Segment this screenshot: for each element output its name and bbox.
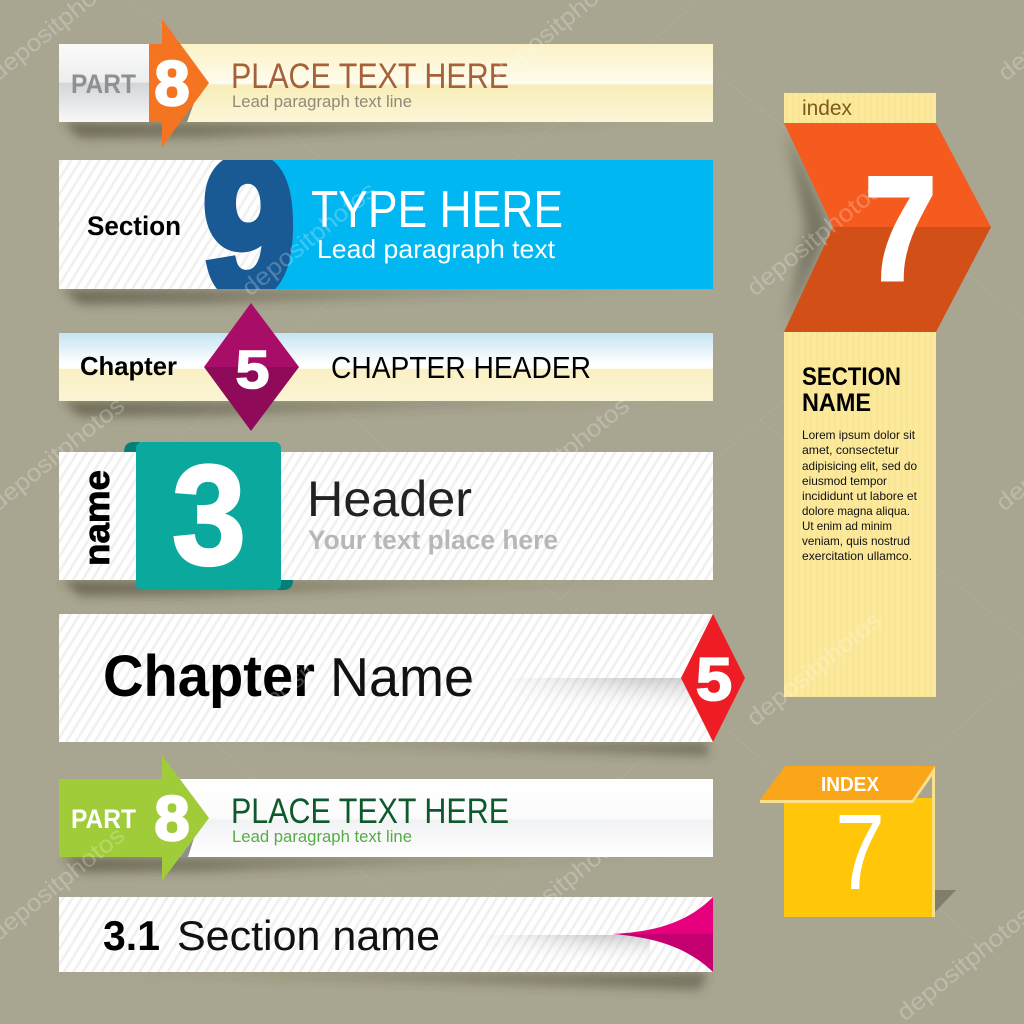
banner: section 9 blue [59,160,713,289]
lead line: Lead paragraph text line [232,92,412,111]
arrow shadow [180,838,194,857]
watermarks: depositphotos [490,822,635,947]
box shadow [935,890,956,912]
banner: chapter name red [59,614,745,742]
body text: Lorem ipsum dolor sit [802,428,916,442]
flap highlight [760,766,935,803]
index column orange [784,93,991,697]
purple diamond [204,303,299,431]
striped panel [59,452,713,580]
body text: exercitation ullamco. [802,549,912,563]
number 5: 5 [236,340,270,400]
body text: Ut enim ad minim [802,519,892,533]
pink curl [612,897,713,972]
orange arrow [149,19,209,147]
banner: section 3.1 pink [59,897,713,972]
section name heading: NAME [802,389,871,417]
number 5: 5 [696,646,732,713]
body text: incididunt ut labore et [802,489,918,503]
number: 3.1 [103,912,160,959]
chapter title bold: Chapter [103,644,315,709]
chevron shadow [786,128,830,328]
text panel [170,44,713,122]
number 8: 8 [154,49,190,119]
index box yellow [760,766,956,917]
body text: amet, consectetur [802,443,899,457]
watermarks: depositphotos [742,607,887,732]
fold shade [503,935,650,952]
chapter label: Chapter [80,351,177,381]
header: CHAPTER HEADER [331,350,591,385]
box body [784,798,933,917]
number 3: 3 [172,436,246,595]
title: TYPE HERE [311,181,563,239]
subtext: Your text place here [308,525,558,555]
orange chevron [784,123,991,332]
section label: Section [87,211,181,241]
orange flap [760,766,935,800]
text panel [170,779,713,857]
body text: dolore magna aliqua. [802,504,910,518]
arrow shadow [180,103,194,122]
fold shade [524,678,690,700]
part label: PART [71,69,136,99]
lead text: Lead paragraph text [317,234,556,264]
green arrow [59,755,209,881]
number 8: 8 [154,784,190,854]
header: Header [307,471,472,527]
index label: INDEX [821,774,880,796]
body text: adipisicing elit, sed do [802,459,917,473]
banner: part 8 orange [59,19,713,147]
right edge [932,766,935,917]
part label: PART [71,804,136,834]
number 7: 7 [865,147,936,310]
index label: index [802,97,852,120]
lead line: Lead paragraph text line [232,827,412,846]
teal block [136,442,281,590]
watermarks: depositphotos [237,607,382,732]
band shadows [62,122,708,990]
number 7: 7 [835,791,885,912]
striped panel [59,160,713,289]
big number 9: 9 [203,118,295,336]
body text: eiusmod tempor [802,474,887,488]
ribbon folds [124,442,293,590]
watermarks: depositphotos [490,392,635,517]
banner: part 8 green [59,755,713,881]
label panel [59,44,149,122]
watermarks: depositphotos [237,177,382,302]
gradient panel [59,333,713,401]
striped panel [59,614,713,742]
body text: veniam, quis nostrud [802,534,910,548]
chapter title regular: Name [330,646,474,708]
watermarks: depositphotos [742,177,887,302]
rotated name: name [76,470,117,566]
watermarks: depositphotos [892,902,1024,1024]
section name: Section name [177,912,440,959]
banner: name 3 teal [59,436,713,595]
yellow text panel [784,332,936,697]
yellow index strip [784,93,936,123]
striped panel [59,897,713,972]
banner: chapter diamond [59,303,713,431]
blue panel [271,160,713,289]
title: PLACE TEXT HERE [231,57,509,96]
section name heading: SECTION [802,363,901,391]
title: PLACE TEXT HERE [231,792,509,831]
red diamond [681,614,745,742]
